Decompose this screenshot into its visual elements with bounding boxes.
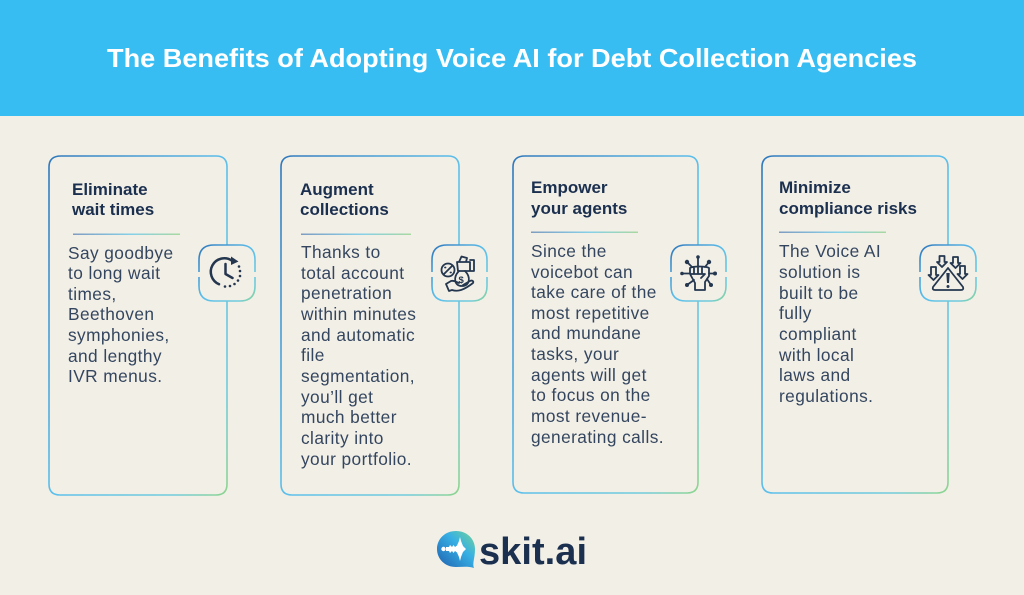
icon: money bag in hand with percent coin: $: [458, 275, 464, 286]
panel: empower your agents: Since the: [531, 241, 607, 261]
panel: augment collections: file: [301, 345, 325, 365]
panel: minimize compliance risks: laws and: [779, 365, 851, 385]
panel: empower your agents: your agents: [531, 199, 627, 218]
panel: minimize compliance risks: [762, 156, 948, 493]
panel: augment collections: much better: [301, 407, 397, 427]
panel: eliminate wait times: Say goodbye: [68, 243, 174, 263]
panel: eliminate wait times: Beethoven: [68, 304, 154, 324]
panel: empower your agents: and mundane: [531, 323, 641, 343]
panel: empower your agents: take care of the: [531, 282, 657, 302]
panel: empower your agents: Empower: [531, 178, 608, 197]
panel: minimize compliance risks: regulations.: [779, 386, 873, 406]
panel: eliminate wait times: times,: [68, 284, 117, 304]
panel: eliminate wait times: [49, 156, 227, 495]
panel: augment collections: Thanks to: [301, 242, 381, 262]
panel: empower your agents: voicebot can: [531, 262, 633, 282]
panel: eliminate wait times: IVR menus.: [68, 366, 162, 386]
panel: augment collections: [281, 156, 459, 495]
panel: augment collections: total account: [301, 263, 404, 283]
panel: empower your agents: most revenue-: [531, 406, 647, 426]
panel: minimize compliance risks: The Voice AI: [779, 241, 881, 261]
panel: minimize compliance risks: Minimize: [779, 178, 851, 197]
logo: skit.ai: skit.ai: [479, 531, 587, 573]
panel: augment collections: segmentation,: [301, 366, 415, 386]
icon: raised fist with network nodes: [671, 245, 726, 301]
header banner: [0, 0, 1024, 116]
panel: augment collections: clarity into: [301, 428, 384, 448]
panel: empower your agents: generating calls.: [531, 427, 664, 447]
panel: minimize compliance risks: compliant: [779, 324, 857, 344]
panel: augment collections: penetration: [301, 283, 392, 303]
header banner: The Benefits of Adopting Voice AI for Debt Collection Agencies: [107, 43, 917, 73]
panel: minimize compliance risks: solution is: [779, 262, 860, 282]
panel: empower your agents: to focus on the: [531, 385, 651, 405]
icon: speech bubble with waveform: [437, 531, 475, 568]
icon: warning triangle with down arrows: [920, 245, 976, 301]
panel: eliminate wait times: wait times: [71, 200, 154, 219]
panel: augment collections: you’ll get: [301, 387, 373, 407]
panel: augment collections: collections: [300, 200, 389, 219]
panel: eliminate wait times: Eliminate: [72, 180, 148, 199]
icon: money bag in hand with percent coin: [432, 245, 487, 301]
icon: clock with dotted arc: [199, 245, 255, 301]
panel: empower your agents: [513, 156, 698, 493]
panel: augment collections: your portfolio.: [301, 449, 412, 469]
panel: minimize compliance risks: built to be: [779, 283, 859, 303]
panel: eliminate wait times: to long wait: [68, 263, 160, 283]
panel: augment collections: within minutes: [300, 304, 416, 324]
panel: augment collections: and automatic: [301, 325, 415, 345]
panel: eliminate wait times: and lengthy: [68, 346, 162, 366]
panel: empower your agents: tasks, your: [531, 344, 619, 364]
panel: eliminate wait times: symphonies,: [68, 325, 170, 345]
panel: empower your agents: most repetitive: [531, 303, 650, 323]
panel: minimize compliance risks: compliance risks: [779, 199, 917, 218]
panel: minimize compliance risks: fully: [779, 303, 812, 323]
panel: empower your agents: agents will get: [531, 365, 647, 385]
panel: minimize compliance risks: with local: [778, 345, 854, 365]
panel: augment collections: Augment: [300, 180, 374, 199]
